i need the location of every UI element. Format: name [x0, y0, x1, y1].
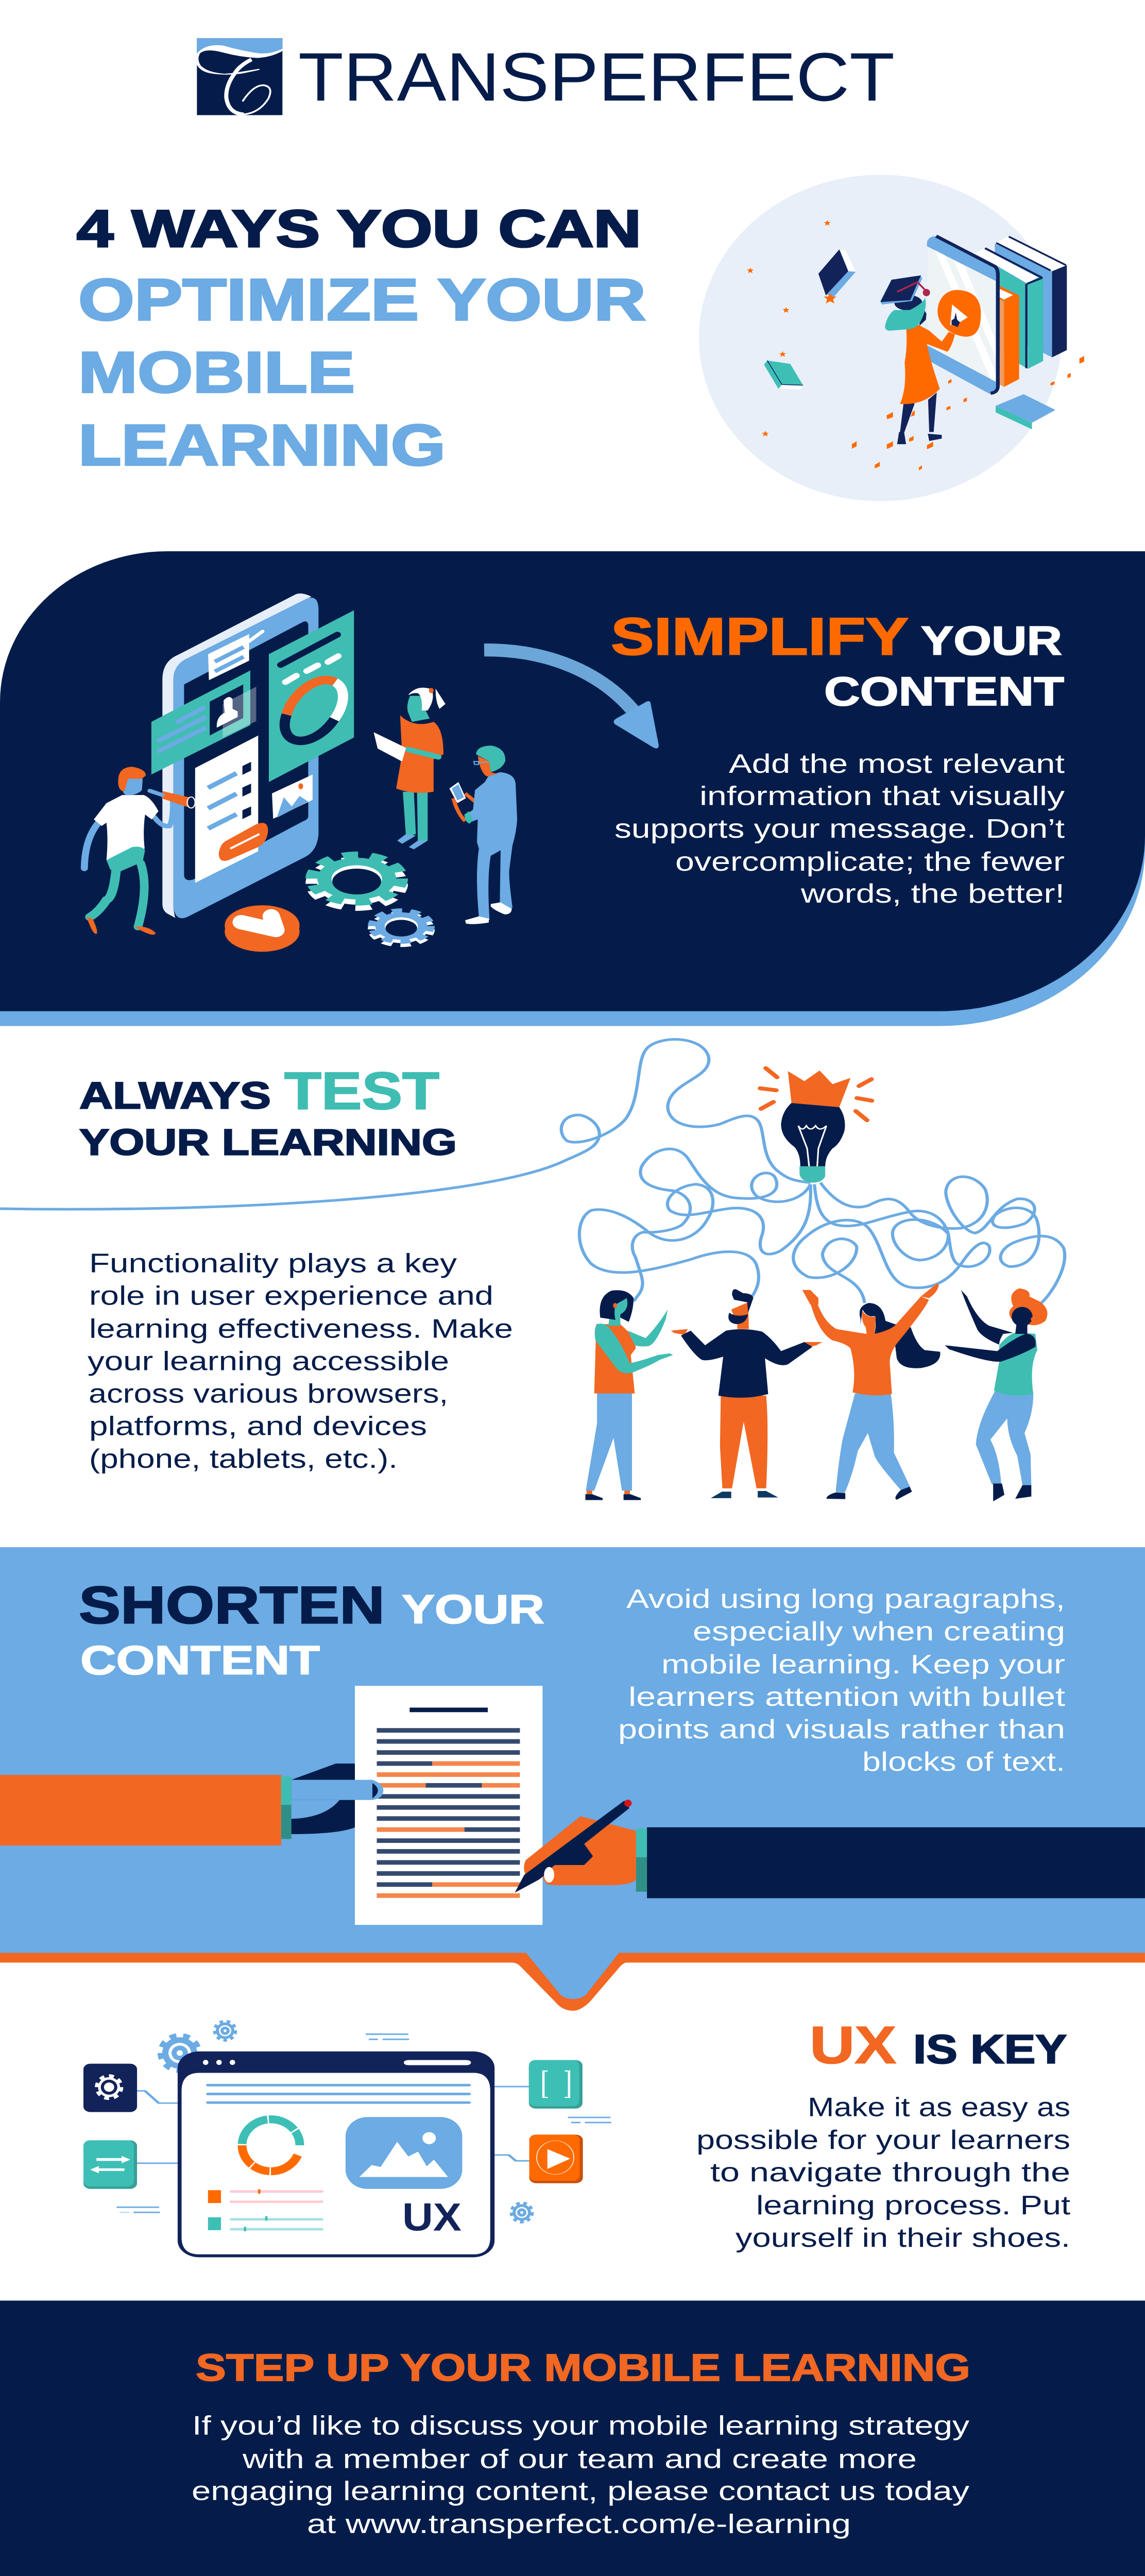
- UX label in window: UX: [402, 2195, 462, 2240]
- browser window illustration: [83, 2034, 611, 2257]
- heading: shorten your content: CONTENT: [80, 1637, 320, 1683]
- body text: UX: yourself in their shoes.: [736, 2223, 1070, 2252]
- body text: shorten: Avoid using long paragraphs,: [626, 1584, 1065, 1614]
- hero background circle: [699, 175, 1062, 501]
- decorative gears: [161, 2022, 532, 2222]
- icon box: arrows: [83, 2140, 137, 2189]
- panel background: [0, 1547, 1145, 1953]
- title: MOBILE: [78, 340, 355, 405]
- panel: simplify your content: [0, 551, 1145, 1026]
- title: OPTIMIZE YOUR: [78, 267, 646, 333]
- panel: UX is key: [83, 2016, 1070, 2257]
- heading: UX is key: [810, 2016, 1067, 2074]
- heading: shorten your content: SHORTEN: [79, 1576, 385, 1634]
- person 4: [945, 1289, 1048, 1501]
- icon: teal gear: [313, 855, 401, 907]
- heading: shorten your content: YOUR: [402, 1586, 544, 1632]
- body text: test: [88, 1248, 513, 1474]
- panel: header with logo and title: [77, 38, 1084, 501]
- phone: [162, 594, 318, 918]
- body text: simplify: information that visually: [699, 781, 1065, 811]
- body text: test: across various browsers,: [89, 1378, 448, 1409]
- tangled strings: [0, 1039, 1065, 1303]
- right arm with pen: [515, 1800, 1145, 1898]
- title: 4 WAYS YOU CAN: [77, 199, 641, 258]
- body text: simplify: [614, 749, 1065, 909]
- icon box: brackets: [529, 2060, 583, 2109]
- body text: test: (phone, tablets, etc.).: [89, 1444, 398, 1474]
- left arm: [0, 1764, 358, 1845]
- person with telescope: [84, 767, 195, 935]
- body text: UX: [696, 2092, 1070, 2252]
- icon box: settings: [83, 2064, 137, 2112]
- heading: simplify your content: YOUR: [921, 618, 1062, 664]
- person with laptop: [374, 688, 446, 850]
- illustration: team building mobile app: [84, 594, 517, 952]
- icon: lightbulb with crown: [760, 1068, 872, 1182]
- teal chart panel: [269, 611, 354, 782]
- picture card: [346, 2117, 462, 2189]
- document: [355, 1686, 542, 1925]
- footer body text: at www.transperfect.com/e-learning: [307, 2509, 851, 2539]
- left thumb: [292, 1780, 383, 1800]
- heading: UX is key: IS KEY: [913, 2026, 1067, 2072]
- panel background shape: [0, 788, 1145, 1026]
- orange divider with pointer: [0, 1953, 1145, 2011]
- body text: test: your learning accessible: [88, 1346, 449, 1376]
- teal profile panel: [151, 670, 256, 774]
- body text: simplify: overcomplicate; the fewer: [675, 846, 1065, 876]
- heading: always test your learning: TEST: [284, 1062, 439, 1120]
- footer heading: STEP UP YOUR MOBILE LEARNING: [196, 2346, 970, 2389]
- body text: test: learning effectiveness. Make: [89, 1313, 513, 1344]
- heading: UX is key: UX: [810, 2016, 896, 2074]
- body text: test: Functionality plays a key: [89, 1248, 457, 1278]
- body text: simplify: Add the most relevant: [729, 749, 1065, 779]
- heading: shorten your content: [79, 1576, 544, 1683]
- body text: UX: Make it as easy as: [808, 2092, 1070, 2122]
- logo: TransPerfect mark: [197, 38, 282, 115]
- legend bars: [208, 2189, 323, 2231]
- footer body text: with a member of our team and create more: [242, 2444, 917, 2474]
- footer background: [0, 2300, 1145, 2576]
- body text: shorten: learners attention with bullet: [628, 1682, 1065, 1711]
- body text: UX: possible for your learners: [696, 2125, 1070, 2155]
- person 3: [802, 1283, 940, 1500]
- body text: shorten: mobile learning. Keep your: [661, 1649, 1065, 1679]
- hero illustration: student at tablet with books: [747, 220, 1084, 470]
- person with tablet: [449, 745, 517, 924]
- panel: footer call to action: [0, 2300, 1145, 2576]
- body text: shorten: points and visuals rather than: [618, 1714, 1065, 1744]
- footer body text: engaging learning content, please contact us today: [192, 2476, 969, 2506]
- heading: simplify your content: CONTENT: [824, 668, 1064, 714]
- body text: simplify: supports your message. Don’t: [614, 814, 1065, 844]
- title: [77, 199, 646, 478]
- logo wordmark: TRANSPERFECT: [298, 39, 895, 115]
- browser window: [178, 2052, 494, 2257]
- heading: simplify your content: SIMPLIFY: [611, 607, 909, 666]
- body text: UX: to navigate through the: [710, 2157, 1070, 2188]
- title: LEARNING: [78, 413, 446, 478]
- body text: UX: learning process. Put: [756, 2190, 1070, 2220]
- body text: simplify: words, the better!: [800, 878, 1065, 909]
- body text: test: platforms, and devices: [89, 1411, 427, 1441]
- body text: shorten: especially when creating: [693, 1616, 1065, 1646]
- icon: blue gear: [372, 911, 431, 945]
- icon: like badge: [225, 905, 300, 952]
- illustration: hands editing a document: [0, 1686, 1145, 1925]
- heading: always test your learning: ALWAYS: [79, 1075, 271, 1117]
- person 1: [585, 1290, 673, 1500]
- heading: always test your learning: YOUR LEARNING: [79, 1122, 457, 1163]
- person 2: [671, 1289, 823, 1498]
- heading: simplify your content: [611, 607, 1064, 714]
- panel: always test your learning: [0, 1039, 1065, 1501]
- body text: shorten: blocks of text.: [862, 1747, 1065, 1776]
- body text: test: role in user experience and: [89, 1280, 493, 1311]
- footer body text: [192, 2410, 969, 2539]
- heading: always test your learning: [79, 1062, 457, 1163]
- panel: shorten your content: [0, 1547, 1145, 2011]
- body text: shorten: [618, 1584, 1065, 1776]
- donut chart: [242, 2120, 300, 2171]
- icon box: play: [529, 2134, 583, 2183]
- arrow: [484, 650, 659, 749]
- illustration: team with tangled lines and lightbulb: [0, 1039, 1065, 1501]
- footer body text: If you’d like to discuss your mobile learning strategy: [192, 2410, 969, 2441]
